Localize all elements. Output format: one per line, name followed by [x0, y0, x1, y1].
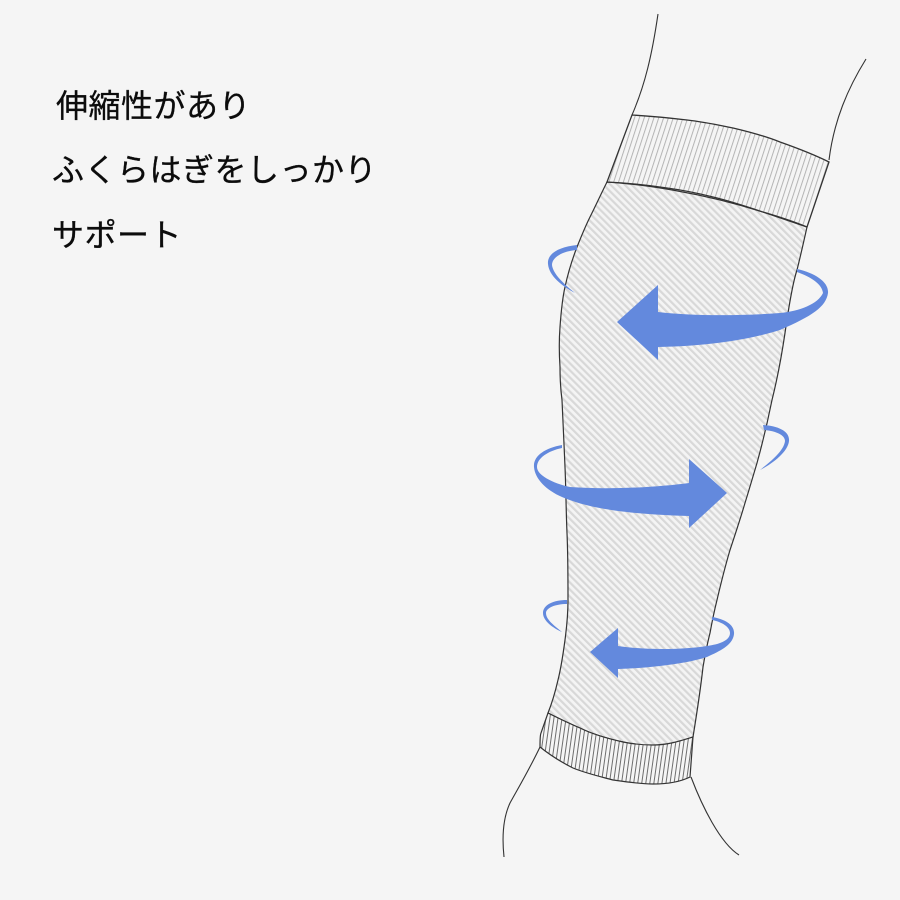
text line 2: ふくらはぎをしっかり [52, 152, 377, 188]
lower arrow back swirl [543, 600, 567, 632]
middle arrow back swirl [760, 425, 789, 470]
arrow: upper, pointing left [548, 245, 828, 360]
arrow: middle, pointing right [534, 425, 789, 528]
hand outline right [691, 777, 739, 855]
hand outline left [503, 747, 540, 857]
upper arrow back swirl [548, 245, 577, 293]
top cuff ribbing [607, 115, 829, 227]
sleeve body [548, 182, 807, 745]
left arm outline top [632, 14, 658, 115]
text block: headline copy [52, 88, 377, 253]
lower arrow body [590, 617, 734, 678]
upper arrow body [617, 269, 828, 360]
arrow: lower, pointing left [543, 600, 734, 678]
right arm outline top [829, 59, 866, 160]
text line 3: サポート [52, 217, 182, 253]
middle arrow body [534, 445, 727, 528]
text line 1: 伸縮性があり [56, 88, 251, 124]
bottom cuff ribbing [540, 713, 693, 784]
